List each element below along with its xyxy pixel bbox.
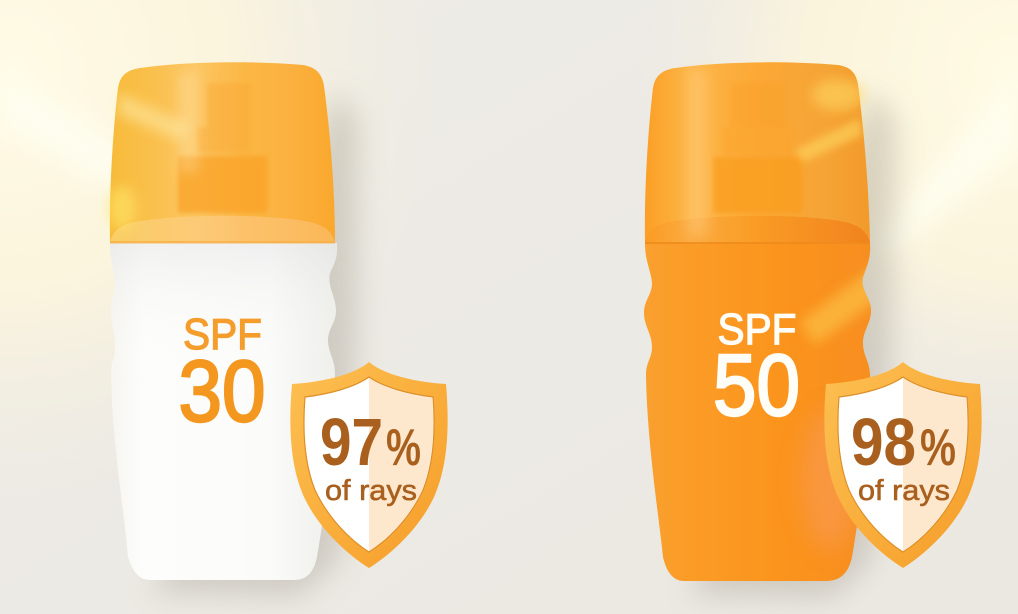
right bottle: SPF 50 xyxy=(644,62,896,598)
shadow: left bottle xyxy=(150,90,358,596)
shield: 97% of rays xyxy=(290,362,448,568)
light flare on cap xyxy=(795,118,862,162)
label: 50: 50 xyxy=(713,337,800,434)
value: 98: 98 xyxy=(851,405,916,480)
shadow: right bottle xyxy=(690,90,896,598)
spray nozzle xyxy=(713,83,802,213)
light flare on body xyxy=(794,267,870,552)
light flare on cap xyxy=(118,92,190,140)
sunlight glow: top right xyxy=(630,0,1018,450)
value: 97: 97 xyxy=(320,405,383,480)
left bottle: SPF 30 xyxy=(108,62,358,596)
percent sign: % xyxy=(920,419,956,477)
cap: translucent orange xyxy=(108,62,335,244)
cap rim xyxy=(645,216,870,243)
percent sign: % xyxy=(386,419,421,477)
label: SPF: SPF xyxy=(718,305,796,354)
sunlight glow: top left xyxy=(0,0,450,510)
bottle body: white xyxy=(110,243,337,580)
caption: of rays: of rays xyxy=(325,475,417,507)
shield: 98% of rays xyxy=(824,362,982,568)
label: 30: 30 xyxy=(178,343,266,440)
spray nozzle xyxy=(178,83,267,213)
caption: of rays: of rays xyxy=(858,475,950,507)
bottle body: orange xyxy=(644,243,871,581)
label: SPF: SPF xyxy=(183,310,262,359)
cap: translucent orange xyxy=(645,62,870,244)
body shading xyxy=(110,243,337,373)
cap rim xyxy=(110,216,335,243)
